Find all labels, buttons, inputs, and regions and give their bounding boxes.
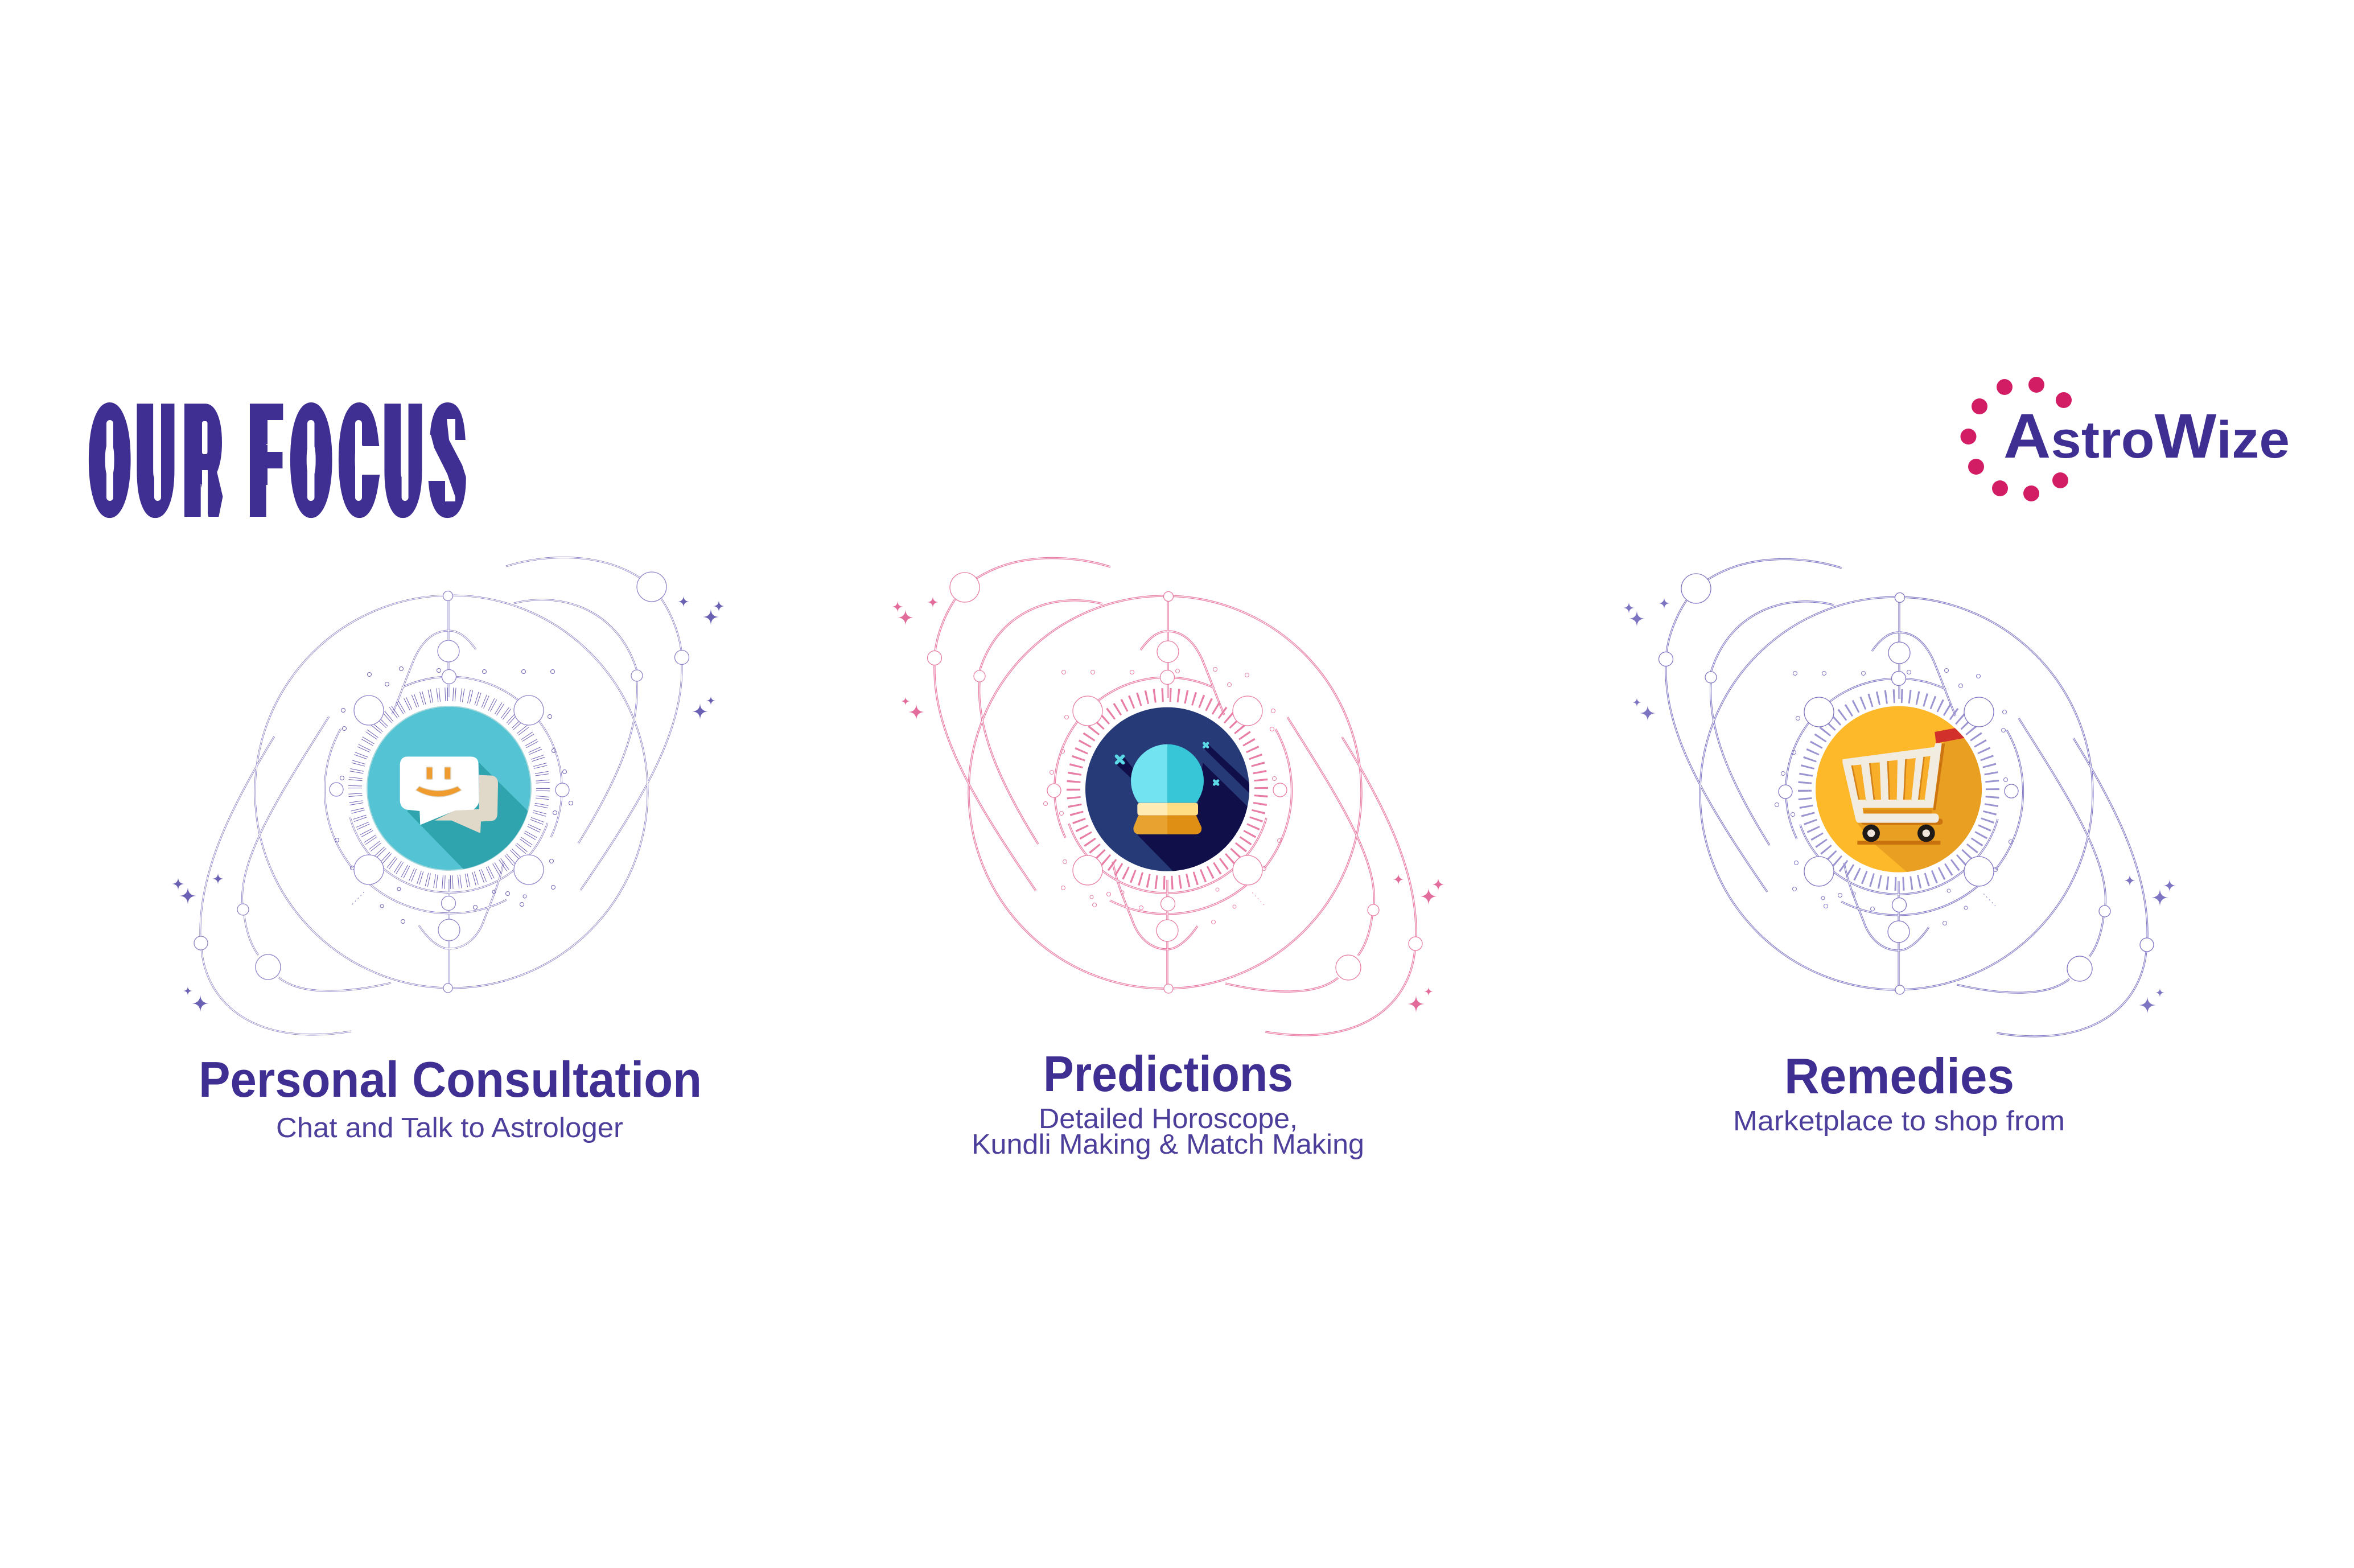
panel: predictions: [892, 558, 1444, 1160]
logo dots: [1960, 377, 2072, 501]
icon: crystal ball: [1085, 707, 1254, 880]
orbit graphic: remedies: [1623, 559, 2176, 1036]
heading: remedies: Remedies: [1784, 1048, 2014, 1104]
subtext: predictions line two: Kundli Making & Match Making: [972, 1129, 1364, 1160]
subtext: predictions line one: Detailed Horoscope,: [1039, 1104, 1298, 1134]
orbit graphic: predictions: [892, 558, 1444, 1035]
subtext: remedies: Marketplace to shop from: [1733, 1106, 2065, 1137]
logo: AstroWize: [1960, 377, 2290, 501]
logo wordmark: AstroWize: [2003, 401, 2290, 471]
heading: personal consultation: Personal Consultation: [199, 1051, 702, 1108]
title: OUR FOCUS: [92, 390, 463, 531]
panel: personal consultation: [172, 557, 725, 1143]
subtext: personal consultation: Chat and Talk to Astrologer: [276, 1113, 623, 1143]
heading: predictions: Predictions: [1043, 1046, 1293, 1102]
panel: remedies: [1623, 559, 2176, 1137]
icon: chat bubbles: [367, 706, 531, 880]
icon: shopping cart: [1816, 706, 1985, 880]
orbit graphic: personal consultation: [172, 557, 725, 1035]
